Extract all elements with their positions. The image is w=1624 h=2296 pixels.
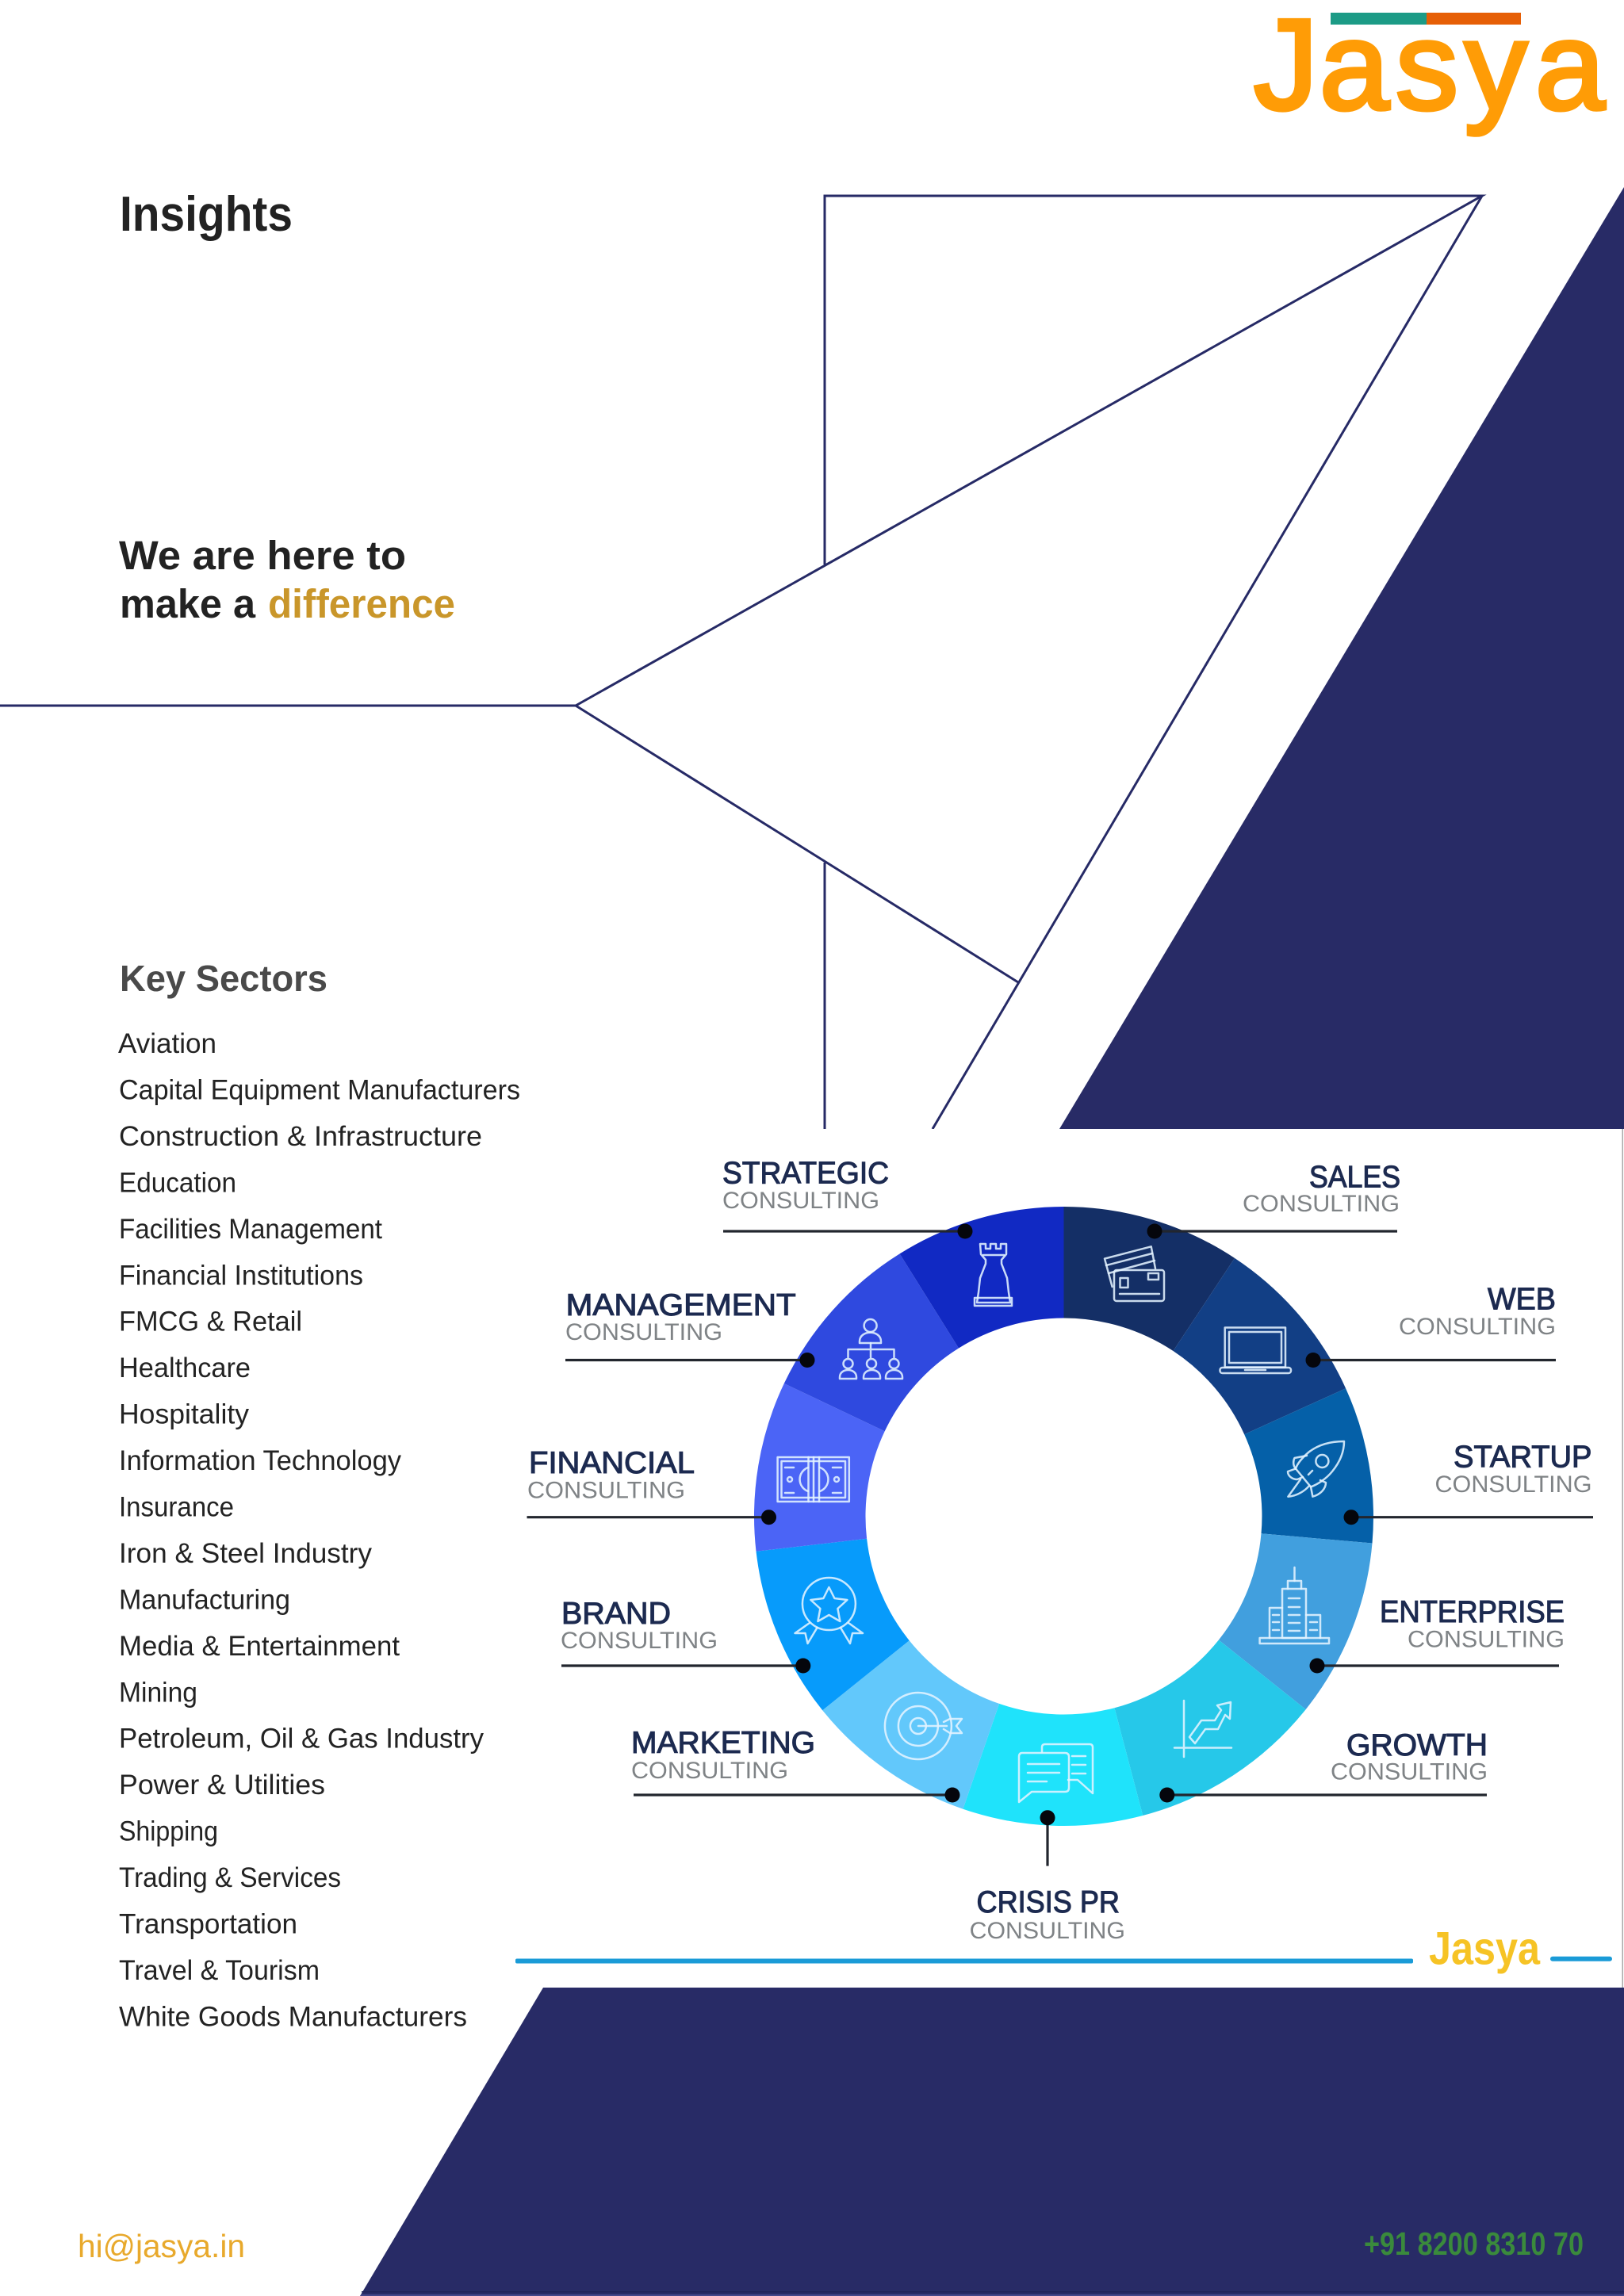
callout: crisis PR consulting xyxy=(970,1810,1125,1944)
icon: credit cards xyxy=(1105,1246,1164,1301)
contact: email: hi@jasya.in xyxy=(78,2228,245,2264)
list: key sectors: Insurance xyxy=(119,1492,234,1522)
panel: consulting services wheel xyxy=(515,1129,1624,1988)
callout: brand consulting: BRAND xyxy=(561,1597,671,1631)
callout: strategic consulting xyxy=(722,1157,972,1238)
callout: growth consulting: GROWTH xyxy=(1346,1728,1488,1762)
callout: web consulting: WEB xyxy=(1488,1283,1556,1316)
list: key sectors: Shipping xyxy=(119,1816,218,1847)
list: key sectors: Mining xyxy=(119,1677,197,1708)
paper plane outline xyxy=(0,196,1482,1129)
callout: startup consulting: STARTUP xyxy=(1454,1440,1592,1475)
callout: financial consulting xyxy=(527,1446,776,1525)
donut segment: startup xyxy=(1244,1388,1373,1543)
list: key sectors: Healthcare xyxy=(119,1353,251,1383)
callout: brand consulting: CONSULTING xyxy=(561,1628,718,1654)
callout: sales consulting xyxy=(1147,1161,1400,1238)
callout: startup consulting: CONSULTING xyxy=(1435,1471,1592,1498)
callout: crisis PR consulting: CONSULTING xyxy=(970,1918,1125,1944)
list: key sectors: Capital Equipment Manufacturers xyxy=(119,1075,520,1105)
heading: Key Sectors: Key Sectors xyxy=(120,958,327,999)
logo: Jasya: a xyxy=(1535,0,1605,136)
donut segment: sales xyxy=(1064,1207,1235,1351)
list: key sectors: Construction & Infrastructure xyxy=(119,1121,482,1152)
donut segment: crisis PR xyxy=(963,1704,1143,1826)
callout: enterprise consulting xyxy=(1310,1595,1565,1673)
callout: strategic consulting: STRATEGIC xyxy=(722,1157,889,1191)
list: key sectors: Trading & Services xyxy=(119,1862,341,1893)
callout: growth consulting xyxy=(1159,1728,1488,1803)
callout: strategic consulting: CONSULTING xyxy=(722,1188,879,1214)
list: key sectors: Facilities Management xyxy=(119,1214,382,1245)
list: key sectors: Manufacturing xyxy=(119,1584,290,1615)
donut segment: enterprise xyxy=(1219,1533,1372,1709)
logo: Jasya: y xyxy=(1465,0,1527,136)
list: key sectors: Iron & Steel Industry xyxy=(119,1538,372,1569)
callout: growth consulting: CONSULTING xyxy=(1331,1758,1488,1785)
callout: brand consulting xyxy=(561,1597,810,1673)
callout: management consulting: CONSULTING xyxy=(565,1319,722,1345)
icon: org chart xyxy=(840,1319,902,1379)
list: key sectors xyxy=(118,1028,520,2032)
navy panel bottom xyxy=(360,1988,1624,2296)
tagline xyxy=(119,533,455,626)
callout: startup consulting xyxy=(1343,1440,1593,1525)
callout: crisis PR consulting: CRISIS PR xyxy=(977,1885,1120,1919)
icon: laptop xyxy=(1220,1327,1291,1373)
list: key sectors: Media & Entertainment xyxy=(119,1631,400,1662)
list: key sectors: FMCG & Retail xyxy=(119,1307,302,1337)
callout: financial consulting: CONSULTING xyxy=(527,1478,685,1504)
icon: growth chart xyxy=(1174,1701,1231,1757)
callout: marketing consulting xyxy=(631,1726,959,1803)
list: key sectors: Transportation xyxy=(119,1909,297,1939)
icon: city buildings xyxy=(1260,1567,1329,1644)
donut segment: strategic xyxy=(900,1207,1064,1348)
contact: phone: +91 8200 8310 70 xyxy=(1364,2225,1584,2262)
list: key sectors: Power & Utilities xyxy=(119,1770,325,1800)
icon: chess rook xyxy=(975,1244,1012,1306)
donut segment: management xyxy=(784,1253,959,1431)
logo: Jasya: a xyxy=(1320,0,1389,136)
donut segment: financial xyxy=(754,1383,885,1552)
callout: enterprise consulting: ENTERPRISE xyxy=(1380,1595,1565,1629)
list: key sectors: Financial Institutions xyxy=(119,1260,363,1291)
footer rule with small logo xyxy=(515,1923,1612,1975)
footer rule with small logo: Jasya xyxy=(1429,1923,1541,1975)
callout: sales consulting: CONSULTING xyxy=(1243,1191,1400,1217)
tagline: We are here to xyxy=(119,533,406,578)
list: key sectors: Aviation xyxy=(118,1028,216,1059)
callout: web consulting: CONSULTING xyxy=(1399,1314,1556,1340)
logo: Jasya: s xyxy=(1396,0,1458,136)
icon: chat bubbles xyxy=(1019,1744,1093,1802)
donut segment: growth xyxy=(1114,1640,1306,1816)
icon: banknote xyxy=(778,1457,849,1502)
list: key sectors: Education xyxy=(119,1167,236,1198)
icon: target with arrow xyxy=(885,1693,962,1759)
logo: Jasya xyxy=(1254,0,1605,136)
list: key sectors: Hospitality xyxy=(119,1399,250,1430)
donut segment: brand xyxy=(756,1539,910,1710)
donut segment: web xyxy=(1174,1258,1346,1434)
donut segment: marketing xyxy=(822,1640,999,1809)
list: key sectors: Petroleum, Oil & Gas Industry xyxy=(119,1724,484,1755)
tagline: make a xyxy=(120,581,256,626)
list: key sectors: Travel & Tourism xyxy=(119,1955,320,1986)
icon: rocket xyxy=(1288,1441,1344,1497)
icon: medal with star xyxy=(795,1578,863,1644)
callout: marketing consulting: MARKETING xyxy=(631,1726,815,1760)
callout: management consulting xyxy=(565,1288,815,1368)
callout: marketing consulting: CONSULTING xyxy=(631,1758,788,1784)
navy triangle top right xyxy=(1059,187,1624,1129)
callout: management consulting: MANAGEMENT xyxy=(566,1288,796,1322)
heading: Insights: Insights xyxy=(120,187,293,242)
callout: enterprise consulting: CONSULTING xyxy=(1408,1627,1565,1652)
callout: web consulting xyxy=(1305,1283,1556,1368)
tagline: difference xyxy=(268,581,455,626)
list: key sectors: Information Technology xyxy=(119,1445,401,1476)
list: key sectors: White Goods Manufacturers xyxy=(119,2001,467,2032)
callout: sales consulting: SALES xyxy=(1309,1161,1400,1195)
callout: financial consulting: FINANCIAL xyxy=(529,1446,695,1480)
